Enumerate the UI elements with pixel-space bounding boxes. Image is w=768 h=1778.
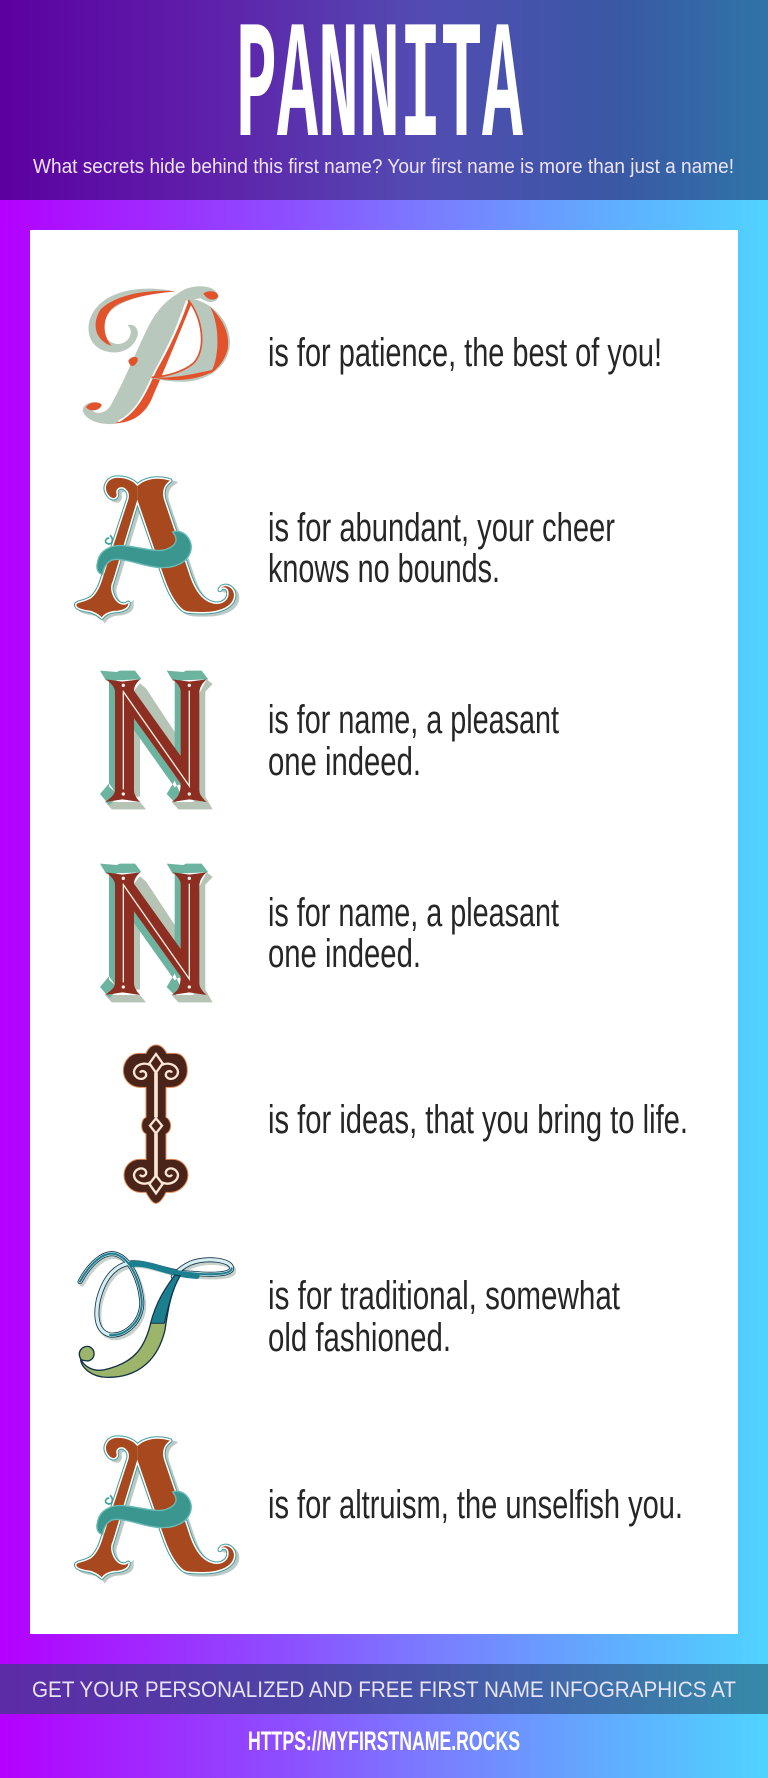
icon: ornate letter P bbox=[83, 286, 230, 424]
footer link: HTTPS://MYFIRSTNAME.ROCKS bbox=[248, 1726, 520, 1756]
text lines bbox=[268, 891, 559, 976]
text lines: one indeed. bbox=[268, 740, 421, 784]
row 1: P bbox=[83, 286, 662, 424]
icon: ornate letter A bbox=[76, 1438, 237, 1580]
row 3: N bbox=[100, 671, 559, 809]
header band bbox=[0, 0, 768, 200]
footer call to action: GET YOUR PERSONALIZED AND FREE FIRST NAME INFOGRAPHICS AT bbox=[32, 1677, 736, 1702]
panel: white letter list bbox=[30, 230, 738, 1634]
icon: ornate letter N bbox=[100, 864, 213, 1002]
text lines bbox=[268, 698, 559, 784]
row 2: A bbox=[76, 478, 615, 620]
text lines: knows no bounds. bbox=[268, 547, 500, 591]
row 6: T bbox=[79, 1254, 620, 1377]
row 5: I bbox=[123, 1045, 688, 1203]
subtitle: What secrets hide behind this first name? Your first name is more than just a name! bbox=[33, 156, 734, 178]
footer band bbox=[0, 1664, 768, 1714]
text lines: one indeed. bbox=[268, 932, 421, 976]
text lines: old fashioned. bbox=[268, 1316, 451, 1360]
text lines: is for abundant, your cheer bbox=[268, 506, 615, 550]
row 4: N bbox=[100, 864, 559, 1002]
icon: ornate letter A bbox=[76, 478, 237, 620]
text lines: is for name, a pleasant bbox=[268, 891, 559, 935]
icon: ornate letter I bbox=[123, 1045, 188, 1203]
text lines: is for name, a pleasant bbox=[268, 698, 559, 742]
text lines bbox=[268, 1274, 620, 1360]
text lines bbox=[268, 506, 615, 591]
text lines: is for traditional, somewhat bbox=[268, 1274, 620, 1318]
row 7: A bbox=[76, 1438, 683, 1580]
icon: ornate letter T bbox=[79, 1254, 234, 1377]
icon: ornate letter N bbox=[100, 671, 213, 809]
